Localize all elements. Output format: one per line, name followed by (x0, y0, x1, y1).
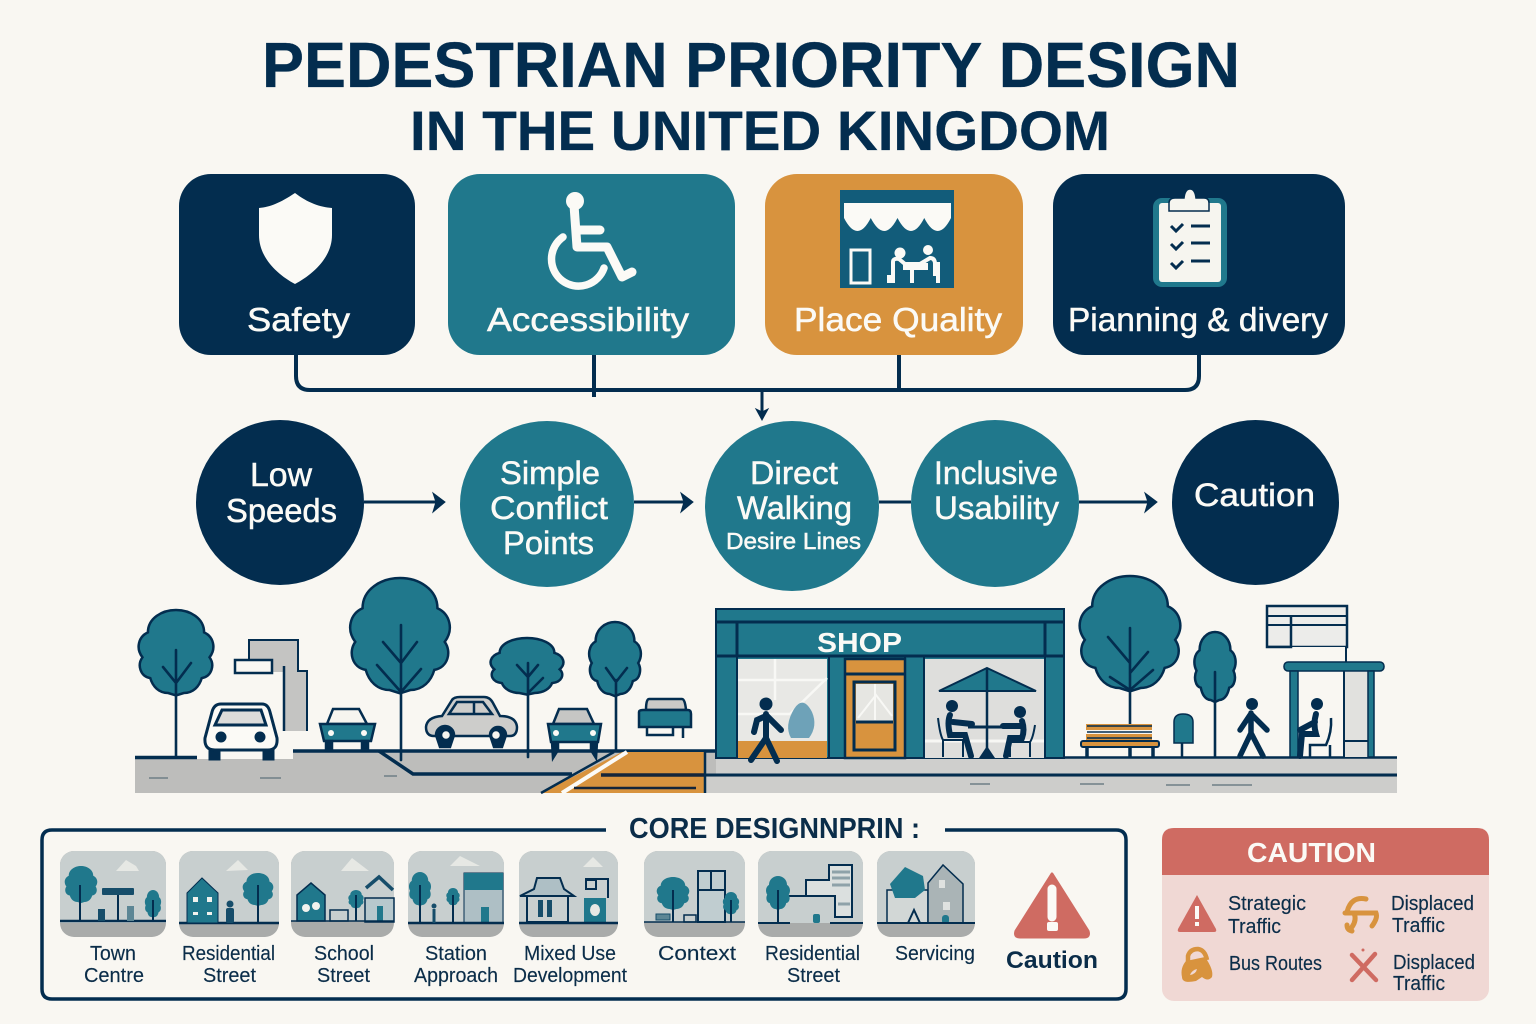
principle: caution (1172, 420, 1339, 585)
connector lines from cards to flow (296, 355, 1199, 420)
shop building (716, 609, 1064, 758)
pedestrian at shop (751, 698, 781, 761)
thumbnail: town centre (60, 851, 166, 937)
thumbnail: mixed use development (519, 851, 618, 937)
label: town centre: Centre (84, 965, 144, 987)
label: residential street two: Street (787, 965, 840, 987)
principle: inclusive usability (911, 420, 1079, 587)
principle: inclusive usability: Usability (934, 490, 1059, 526)
label: school street: School (314, 943, 374, 965)
label: caution: Caution (1006, 947, 1098, 974)
trees (139, 576, 1236, 760)
principle: simple conflict points: Conflict (490, 490, 608, 526)
principle: low speeds (196, 420, 364, 585)
thumbnail: residential street (179, 851, 279, 937)
label: school street: Street (317, 965, 370, 987)
road surface (135, 750, 1397, 793)
principle: low speeds: Low (250, 456, 312, 493)
bus shelter (1267, 606, 1384, 757)
principle: direct walking desire lines: Walking (737, 490, 852, 526)
label: station approach (414, 943, 498, 987)
item: displaced traffic one: Traffic (1392, 915, 1445, 937)
principle: simple conflict points (460, 421, 634, 587)
icon: cafe shopfront (840, 190, 954, 288)
principle: caution: Caution (1194, 477, 1315, 513)
item: displaced traffic two: Displaced (1393, 952, 1475, 974)
arrows between principle circles (364, 493, 1157, 512)
label: servicing: Servicing (895, 943, 975, 965)
principle: inclusive usability: Inclusive (934, 455, 1058, 491)
thumbnail: school street (291, 851, 394, 937)
icon: caution triangle (1016, 874, 1088, 937)
label: residential street: Residential (182, 943, 275, 965)
label: residential street two: Residential (765, 943, 860, 965)
street scene illustration (135, 576, 1397, 793)
item: bus routes (1182, 949, 1322, 982)
label: station approach: Approach (414, 965, 498, 987)
panel: planning card (1053, 174, 1345, 355)
label: town centre (84, 943, 144, 987)
item: strategic traffic: Traffic (1228, 916, 1281, 938)
principle: direct walking desire lines (705, 421, 879, 591)
label: mixed use development (513, 943, 627, 987)
label: residential street: Street (203, 965, 256, 987)
label: safety: Safety (247, 301, 351, 338)
item: displaced traffic two (1352, 948, 1475, 995)
item: displaced traffic two: Traffic (1393, 973, 1445, 995)
label: accessibility: Accessibility (487, 301, 690, 338)
item: strategic traffic: Strategic (1228, 893, 1306, 915)
right window cafe (924, 659, 1044, 758)
title (262, 29, 1240, 162)
label: station approach: Station (425, 943, 487, 965)
car: teal front (320, 709, 375, 750)
label: place quality: Place Quality (794, 301, 1003, 338)
thumbnail: station approach (408, 851, 504, 937)
icon: wheelchair (552, 192, 632, 286)
shop sign: SHOP (817, 627, 902, 658)
label: school street (314, 943, 374, 987)
label: mixed use development: Mixed Use (524, 943, 616, 965)
item: displaced traffic one: Displaced (1391, 893, 1474, 915)
crossing (541, 752, 705, 793)
seated person (1300, 698, 1331, 757)
pedestrian walking (1240, 698, 1267, 756)
principle: low speeds: Speeds (226, 492, 337, 529)
car: white front (205, 704, 277, 759)
item: bus routes: Bus Routes (1229, 953, 1322, 975)
item: displaced traffic one (1345, 893, 1474, 937)
caution heading: CAUTION (1247, 837, 1376, 868)
principle: simple conflict points: Simple (500, 455, 600, 491)
principle: simple conflict points: Points (503, 525, 594, 561)
car: grey side (426, 697, 517, 747)
thumbnail: context (644, 851, 745, 937)
title: IN THE UNITED KINGDOM (410, 99, 1110, 162)
panel: caution (1162, 828, 1489, 1001)
door (845, 659, 905, 758)
white patch and sign structure (197, 640, 307, 759)
icon: clipboard (1153, 189, 1227, 287)
title: PEDESTRIAN PRIORITY DESIGN (262, 29, 1240, 101)
panel: core design principles (42, 813, 1126, 999)
panel: place quality card (765, 174, 1023, 355)
bin (1174, 714, 1193, 757)
panel: accessibility card (448, 174, 735, 355)
left window (738, 659, 827, 758)
car: rear (639, 699, 691, 738)
panel: safety card (179, 174, 415, 355)
icon: shield (259, 193, 332, 284)
label: residential street (182, 943, 275, 987)
label: residential street two (765, 943, 860, 987)
thumbnail: servicing (877, 851, 975, 937)
car: grey and teal front (548, 709, 601, 758)
panel heading: CORE DESIGNNPRIN : (629, 813, 920, 845)
item: strategic traffic (1178, 893, 1306, 938)
label: mixed use development: Development (513, 965, 627, 987)
label: context: Context (658, 943, 736, 965)
label: planning: Pianning & divery (1068, 301, 1328, 338)
thumbnail: residential street two (758, 851, 863, 937)
principle: direct walking desire lines: Direct (750, 455, 838, 491)
label: town centre: Town (90, 943, 136, 965)
bench (1081, 726, 1159, 757)
principle: direct walking desire lines: Desire Lines (726, 528, 861, 554)
